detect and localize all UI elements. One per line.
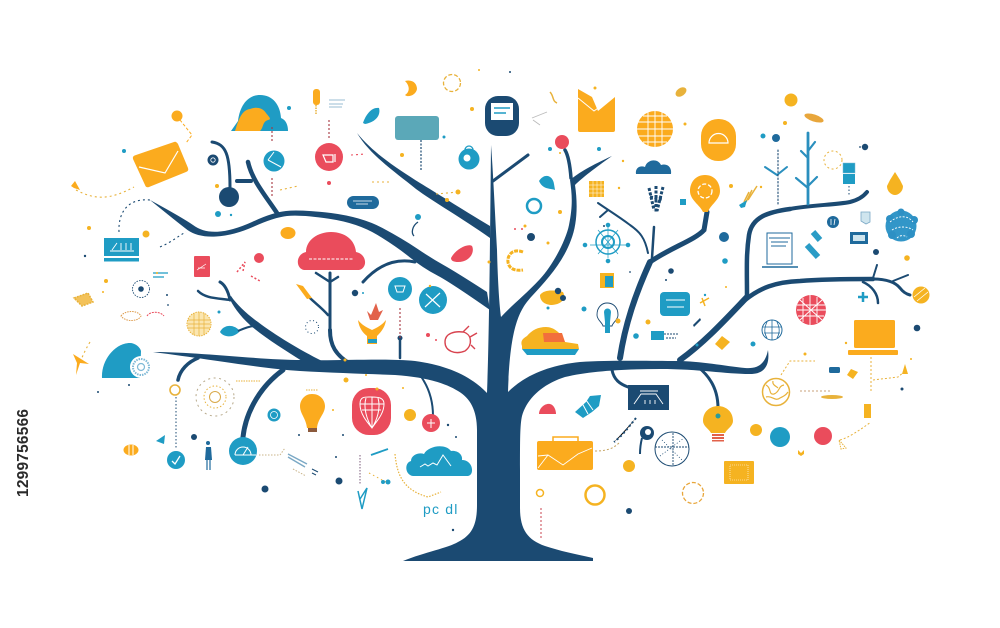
icon: blue check circle <box>167 451 185 469</box>
icon: blue ball lower <box>770 427 790 447</box>
icon: brain ball <box>762 378 790 406</box>
icon: amber scribble <box>74 293 93 306</box>
icon: blue leaf <box>220 326 240 336</box>
icon: amber ring with dotted line <box>170 385 180 449</box>
icon: small blue bottle <box>680 199 686 205</box>
icon: amber small ball <box>646 320 650 324</box>
icon: blue fish <box>156 435 165 444</box>
icon: blue display box <box>104 238 139 262</box>
icon: red tool top <box>367 303 383 320</box>
icon: blue laptop <box>850 232 868 244</box>
icon: blue dot mid <box>722 258 728 264</box>
blue dots <box>122 106 766 484</box>
icon: tool base <box>368 339 377 343</box>
icon: blue gem <box>861 212 870 224</box>
icon: navy dot right <box>900 388 904 390</box>
icon: amber folder <box>578 89 615 132</box>
icon: blue and amber tile <box>600 273 614 288</box>
icon: amber lattice globe <box>187 312 211 336</box>
icon: red globe pill <box>352 388 391 435</box>
amber dots <box>87 69 912 411</box>
icon: lower circle <box>762 320 782 340</box>
icon: amber cup <box>847 369 858 379</box>
icon: amber ornaments <box>784 94 798 106</box>
icon: envelope <box>133 142 188 187</box>
icon: blue rocket <box>575 395 601 418</box>
icon: navy dot corner <box>914 325 920 331</box>
icon: amber pin and crescent <box>172 74 460 143</box>
centre right icons <box>508 176 930 355</box>
icon: navy dots left <box>191 434 342 492</box>
icon: small blue ball <box>633 333 639 339</box>
icon: amber leaf <box>803 112 825 124</box>
icon: amber lightbulb <box>690 175 720 212</box>
icon: amber rings <box>536 482 704 539</box>
icon: navy small dot <box>668 268 674 274</box>
icon: amber seed <box>674 85 688 99</box>
icon: red note <box>194 256 210 277</box>
icon: amber splash <box>715 336 730 350</box>
dotted routes upper left <box>76 120 458 362</box>
icon: blue and amber brushes <box>744 186 757 202</box>
icon: red dot small <box>254 253 264 263</box>
icon: blue scribble ball <box>268 408 280 422</box>
icon: blue key and arrow <box>358 449 441 509</box>
icon: red ball lower <box>814 427 832 445</box>
text: pc dl label: pc dl <box>423 501 459 517</box>
icon: blue tag <box>651 331 664 340</box>
icon: blue dome with fingerprint <box>102 343 152 378</box>
stem ball <box>219 187 239 207</box>
icon: seal <box>132 280 150 298</box>
icon: red pin circle <box>422 414 440 432</box>
stem node <box>398 336 402 340</box>
icon: blue key <box>539 176 555 190</box>
icon: navy seal <box>626 508 632 514</box>
icon: amber square <box>724 461 754 484</box>
icon: blue shrub <box>886 208 918 242</box>
icon: amber hand <box>887 172 903 195</box>
lower right icons <box>521 327 908 539</box>
icon: amber pill badge <box>701 119 736 161</box>
icon: blue and navy ornament <box>693 318 701 327</box>
icon: amber ball scribble <box>623 460 635 472</box>
icon: amber blob with balls <box>540 290 564 305</box>
icon: navy blueprint <box>628 385 669 410</box>
scattered dots <box>84 69 912 531</box>
left mid icons <box>71 181 477 375</box>
icon: dash circle <box>306 320 318 334</box>
icon: bulb core <box>604 308 611 333</box>
icon: amber leaf right <box>821 395 843 399</box>
icon: blue ball <box>719 232 729 242</box>
icon: blue bars <box>153 273 168 277</box>
icon: seal core <box>138 286 144 292</box>
icon: blue chat box <box>660 292 690 316</box>
upper right icons <box>532 85 918 274</box>
icon: blue link <box>412 214 421 236</box>
icon: amber dashes <box>595 442 620 451</box>
icon: amber laptop <box>848 320 898 355</box>
icon: amber oval <box>280 227 296 239</box>
icon: amber heart <box>798 450 804 456</box>
icon: red brain <box>539 404 556 414</box>
icon: amber tool <box>358 320 386 344</box>
red dots <box>327 181 523 341</box>
icon: blue cloud with amber bird <box>231 95 288 131</box>
icon: stripe pen <box>259 448 318 476</box>
left upper twigs <box>178 142 433 437</box>
icon: idea bulb outline <box>597 303 618 326</box>
icon: blue spiral <box>527 199 541 213</box>
icon: navy dashes <box>614 418 636 442</box>
icon: amber bee right <box>750 424 762 436</box>
icon: navy bell <box>640 426 654 454</box>
icon: amber squiggle <box>550 92 557 103</box>
icon: teal sign <box>395 116 439 170</box>
icon: blue capsules <box>807 232 820 257</box>
icon: amber stripe ball <box>912 286 930 304</box>
icon: blue target <box>583 223 630 263</box>
icon: red loop <box>147 312 164 316</box>
icon: brush head <box>739 200 747 208</box>
icon: red dot <box>555 135 569 149</box>
icon: note lines <box>589 181 604 197</box>
icon: person <box>205 441 212 470</box>
icon: blue cloud lower <box>406 446 472 476</box>
icon: amber lock <box>864 404 871 418</box>
icon: blue feather tree <box>649 186 663 212</box>
icon: blue bug <box>772 134 780 142</box>
icon: blue gauge circle <box>229 437 257 465</box>
icon: navy badge <box>827 216 839 228</box>
lower left limb <box>229 296 322 361</box>
icon: big red cloud <box>298 232 365 270</box>
right upper branches <box>493 150 910 408</box>
icon: document badge <box>485 96 519 136</box>
text: image id: 1299756566 <box>15 409 32 497</box>
icon: amber ball <box>404 409 416 421</box>
icon: amber grid note <box>589 181 604 197</box>
icon: small navy circle <box>527 233 535 241</box>
icon: amber lightbulb lower <box>300 390 325 432</box>
tree trunk and main limbs <box>153 145 768 561</box>
icon: amber arrow left <box>73 354 89 375</box>
icon: amber star <box>700 298 709 306</box>
icon: amber red gauge <box>121 312 141 320</box>
icon: tag text lines <box>664 334 678 338</box>
icon: navy balls <box>555 288 561 294</box>
icon: notepad <box>762 233 798 267</box>
icon: navy dot <box>352 290 358 296</box>
icon: amber bee <box>124 444 138 456</box>
icon: amber arrow <box>71 181 80 190</box>
icon: blue plus <box>858 292 868 302</box>
icon: red badge <box>315 143 343 171</box>
icon: blue speech pill <box>347 196 379 209</box>
icon: red scatter <box>237 262 260 281</box>
icon: amber car <box>521 327 579 355</box>
icon: scribble grey <box>532 112 547 125</box>
icon: dotted sun <box>196 378 261 416</box>
icon: amber arrow right <box>902 364 908 374</box>
icon: tile inner <box>605 276 613 287</box>
big left limb <box>150 200 490 310</box>
icon: amber dotted ring <box>824 151 842 169</box>
icon: leaf stem <box>238 326 256 331</box>
navy dots <box>84 71 879 531</box>
icon: amber cog <box>508 251 523 270</box>
icon: navy cloud <box>636 160 671 174</box>
icon: briefcase <box>537 437 593 470</box>
icon: blue bag circle <box>458 146 480 170</box>
note lines <box>329 100 345 107</box>
icon: blue feather <box>363 108 379 124</box>
icon: navy bus <box>829 367 840 373</box>
icon: navy ball two <box>560 295 566 301</box>
icon: small navy ring <box>208 154 218 166</box>
icon: blue plant <box>765 133 817 205</box>
icon: teal and blue circles <box>388 277 447 314</box>
upper left limb <box>357 133 490 238</box>
icon: blue clock <box>264 150 284 172</box>
icon: amber capsule stack <box>313 89 320 114</box>
icon: red antenna ring <box>445 326 477 353</box>
icon: amber globe <box>637 111 673 147</box>
tree <box>150 133 910 561</box>
icon: red globe <box>796 295 826 325</box>
icon: lattice <box>188 312 210 336</box>
icon: amber corn <box>296 284 312 299</box>
icon: dotted lines right <box>781 357 904 449</box>
icon: red gem <box>451 245 473 262</box>
icon: amber bulb lower <box>703 406 733 442</box>
icon: dial <box>655 432 689 466</box>
icon: blue cylinder <box>843 163 855 196</box>
